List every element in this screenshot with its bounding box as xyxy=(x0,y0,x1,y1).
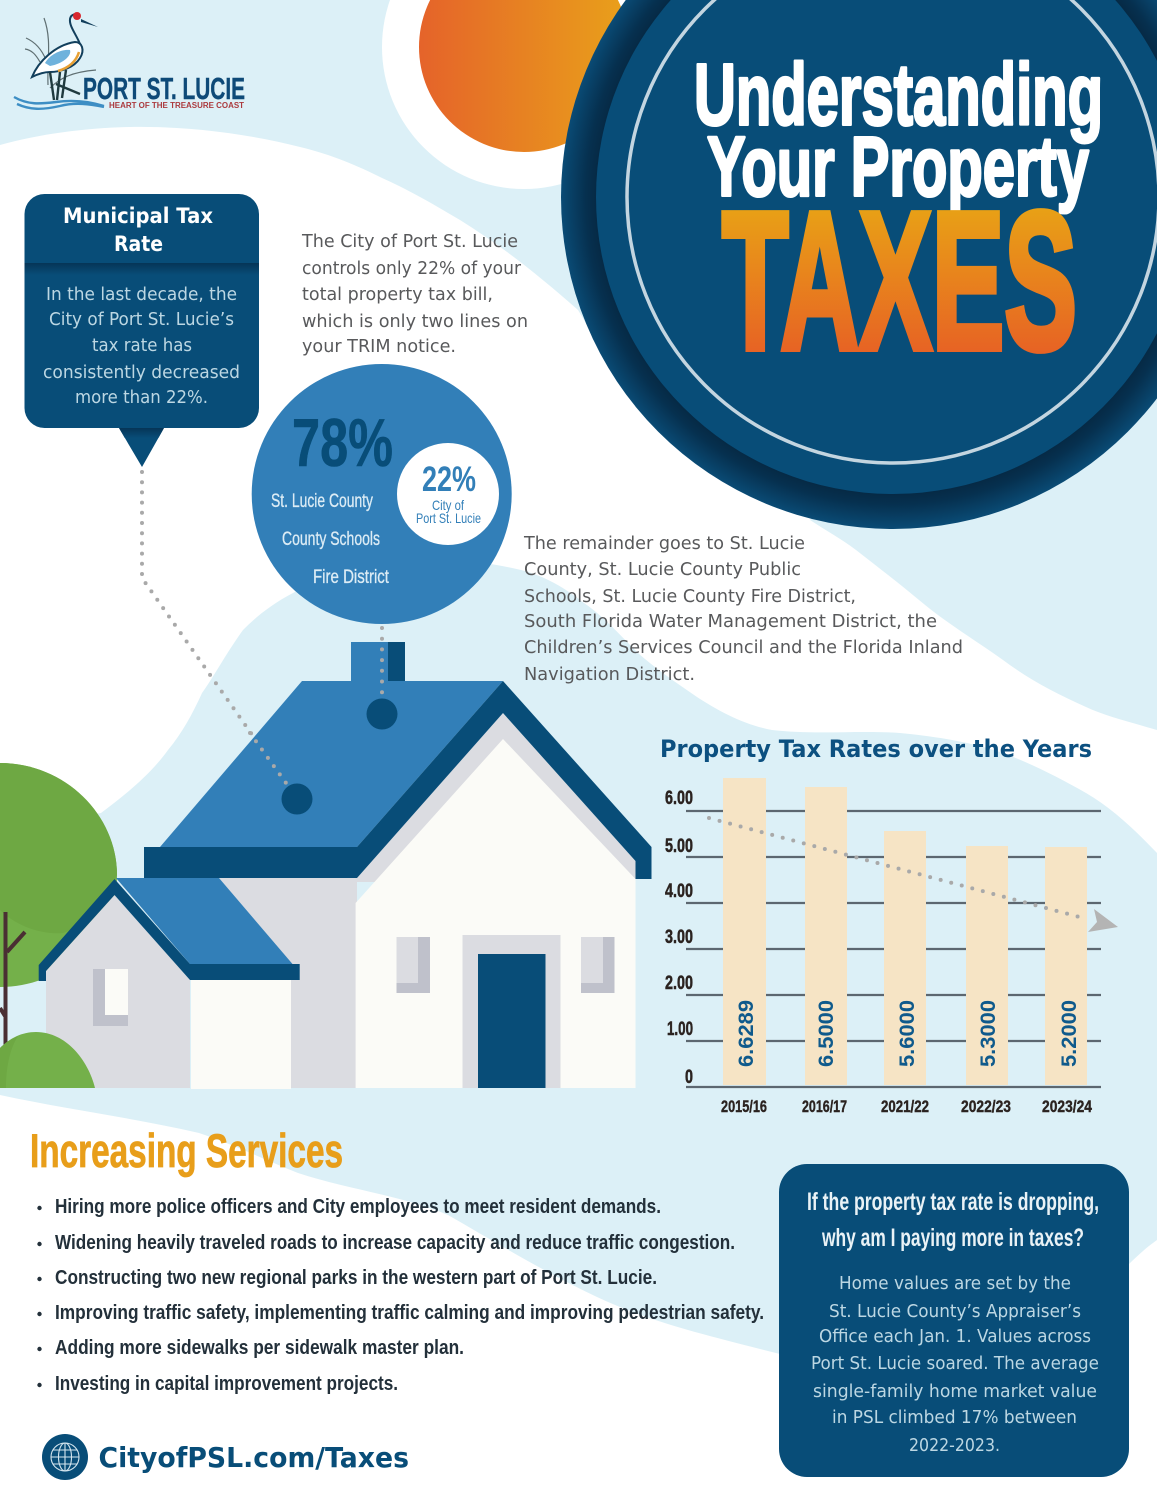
dotted leader: pie to roof xyxy=(380,628,384,695)
small wing trim xyxy=(39,879,300,981)
heading: Municipal Tax xyxy=(63,204,213,228)
bar values: 6.5000 xyxy=(815,1000,838,1067)
panel body: in PSL climbed 17% between xyxy=(832,1408,1077,1428)
bar values xyxy=(735,1000,1081,1067)
logo: Port St. Lucie xyxy=(14,12,245,110)
text block: remainder: Children’s Services Council and the Florida Inland xyxy=(524,637,963,658)
website link xyxy=(42,1434,409,1480)
text block: city share: your TRIM notice. xyxy=(302,336,456,357)
list: services: Investing in capital improvement projects. xyxy=(55,1373,398,1395)
bars xyxy=(723,778,1087,1085)
text block: city share: which is only two lines on xyxy=(302,311,528,332)
text block: remainder: The remainder goes to St. Lucie xyxy=(523,533,805,554)
dotted leader: callout to roof xyxy=(142,472,286,783)
small window xyxy=(93,969,128,1026)
y axis labels xyxy=(665,788,693,1088)
x axis labels xyxy=(721,1097,1092,1116)
small wing roof xyxy=(116,878,292,964)
chart title: Property Tax Rates over the Years xyxy=(660,735,1092,763)
water waves xyxy=(14,97,104,109)
small wing front wall xyxy=(191,980,291,1089)
window right xyxy=(581,937,614,993)
tree xyxy=(0,763,117,1045)
panel heading xyxy=(807,1188,1099,1252)
text block: remainder: South Florida Water Management District, the xyxy=(524,611,937,632)
icon: globe xyxy=(42,1434,88,1480)
panel body: St. Lucie County’s Appraiser’s xyxy=(829,1302,1081,1322)
body text xyxy=(43,285,240,408)
body text: more than 22%. xyxy=(75,388,208,408)
logo tagline: HEART OF THE TREASURE COAST xyxy=(109,101,244,110)
panel body: Office each Jan. 1. Values across xyxy=(819,1327,1091,1347)
label: St. Lucie County: St. Lucie County xyxy=(271,491,373,512)
chimney xyxy=(351,642,405,682)
panel body: Home values are set by the xyxy=(839,1274,1071,1294)
body text: tax rate has xyxy=(92,336,192,356)
label: Fire District: Fire District xyxy=(313,567,390,588)
y axis labels: 1.00 xyxy=(667,1019,693,1040)
inset: 22% city share: Port St. Lucie xyxy=(416,510,481,526)
heading: Rate xyxy=(114,232,163,256)
list: services: Constructing two new regional parks in the western part of Port St. Lucie. xyxy=(55,1267,657,1289)
panel body xyxy=(811,1274,1099,1456)
roof marker: lower xyxy=(282,784,312,814)
bar values: 5.6000 xyxy=(896,1000,919,1067)
y axis labels: 6.00 xyxy=(665,788,693,809)
logo wordmark: PORT ST. LUCIE xyxy=(83,71,245,106)
sun circle xyxy=(382,0,666,189)
title medallion xyxy=(561,0,1157,529)
y axis labels: 0 xyxy=(685,1067,693,1088)
x axis labels: 2022/23 xyxy=(961,1097,1011,1116)
dotted leader: roof overlay xyxy=(250,733,286,783)
y axis labels: 5.00 xyxy=(665,836,693,857)
y axis labels: 3.00 xyxy=(665,927,693,948)
bar values: 6.6289 xyxy=(735,1000,758,1067)
panel: municipal tax rate callout xyxy=(24,194,259,467)
body text: City of Port St. Lucie’s xyxy=(49,310,234,330)
roof marker: upper xyxy=(366,698,398,730)
text block: remainder: Navigation District. xyxy=(524,664,695,685)
url text: CityofPSL.com/Taxes xyxy=(98,1441,409,1474)
main gable wall xyxy=(356,713,636,882)
trend arrow xyxy=(709,818,1118,932)
text block: remainder xyxy=(523,533,963,685)
body text: In the last decade, the xyxy=(46,285,237,305)
door xyxy=(462,935,560,1088)
bar values: 5.3000 xyxy=(977,1000,1000,1067)
bar values: 5.2000 xyxy=(1058,1000,1081,1067)
list: services: Widening heavily traveled roads to increase capacity and reduce traffic congestion. xyxy=(55,1232,735,1254)
body text: consistently decreased xyxy=(43,363,240,383)
window left xyxy=(396,937,430,993)
list: services: Adding more sidewalks per sidewalk master plan. xyxy=(55,1337,464,1359)
background wave: top band xyxy=(0,0,660,330)
background wave: right band xyxy=(810,380,1157,730)
small wing gable xyxy=(46,895,190,1088)
x axis labels: 2023/24 xyxy=(1042,1097,1092,1116)
text block: remainder: Schools, St. Lucie County Fire District, xyxy=(524,586,856,607)
heading: increasing services: Increasing Services xyxy=(30,1124,343,1177)
panel body: Port St. Lucie soared. The average xyxy=(811,1354,1099,1374)
share circle: 78% and 22% xyxy=(252,364,512,624)
side wall xyxy=(219,878,357,1088)
inset: 22% city share xyxy=(397,443,499,545)
list: services: Improving traffic safety, implementing traffic calming and improving pedestrian safety. xyxy=(55,1302,764,1324)
background wave: central blob xyxy=(0,560,1157,1368)
y axis labels: 2.00 xyxy=(665,973,693,994)
text block: city share: total property tax bill, xyxy=(302,284,493,305)
x axis labels: 2016/17 xyxy=(802,1097,847,1116)
inset: 22% city share: City of xyxy=(432,497,464,513)
text block: remainder: County, St. Lucie County Public xyxy=(524,559,801,580)
stat: 78%: 78% xyxy=(292,405,393,481)
main roof trim xyxy=(144,681,652,879)
text block: city share: The City of Port St. Lucie xyxy=(301,231,518,252)
bush xyxy=(0,1032,95,1088)
panel: why am I paying more xyxy=(779,1164,1129,1477)
panel body: 2022-2023. xyxy=(909,1436,1000,1456)
inset: 22% city share: 22% xyxy=(422,460,476,499)
panel body: single-family home market value xyxy=(813,1382,1097,1402)
main roof xyxy=(160,681,503,847)
heading xyxy=(63,204,213,256)
chart: property tax rates over the years xyxy=(660,735,1118,1116)
label: County Schools: County Schools xyxy=(282,529,380,550)
list: services xyxy=(37,1196,764,1395)
x axis labels: 2021/22 xyxy=(881,1097,929,1116)
x axis labels: 2015/16 xyxy=(721,1097,767,1116)
house illustration xyxy=(0,642,652,1089)
icon: heron xyxy=(25,12,98,100)
text block: city share xyxy=(301,231,528,357)
text block: city share: controls only 22% of your xyxy=(302,258,522,279)
y axis labels: 4.00 xyxy=(665,881,693,902)
list: services: Hiring more police officers and City employees to meet resident demands. xyxy=(55,1196,661,1218)
